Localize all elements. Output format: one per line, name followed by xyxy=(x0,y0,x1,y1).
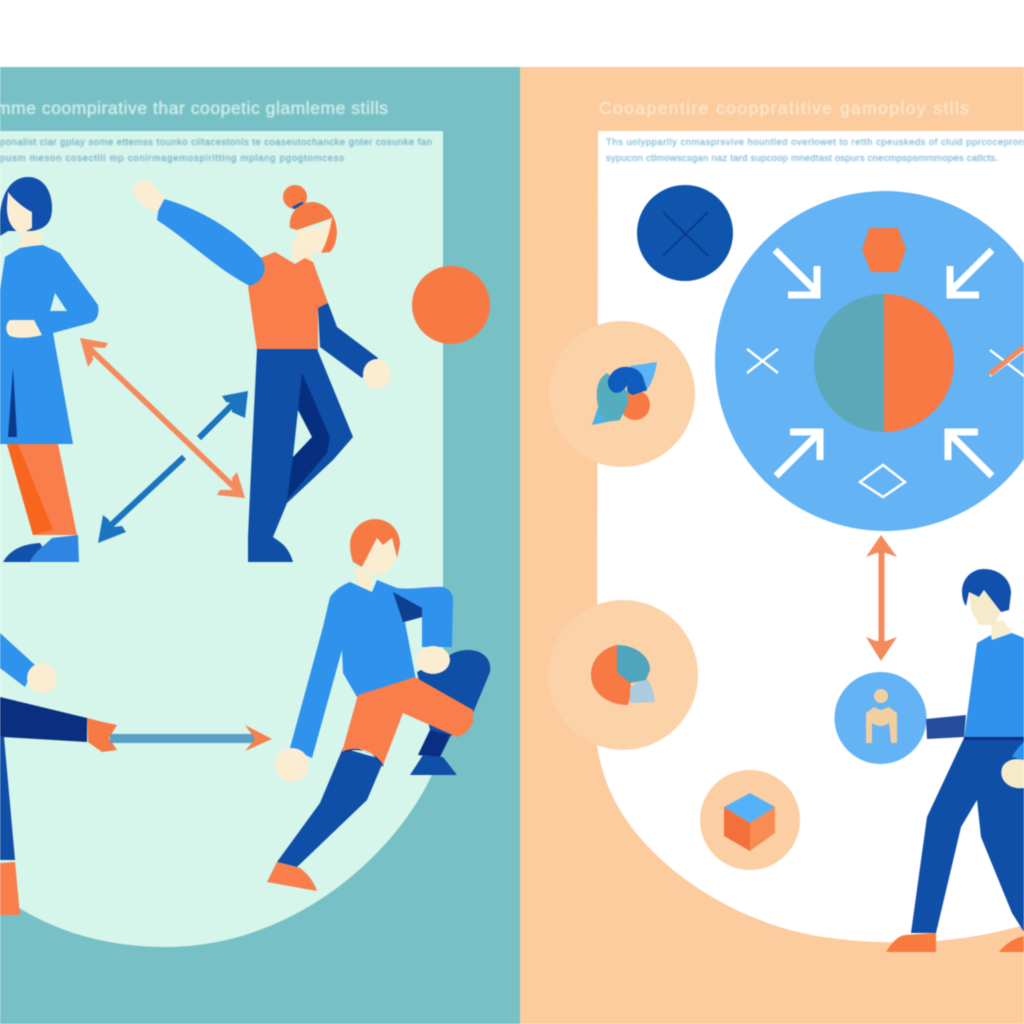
figure: cooperative player xyxy=(886,569,1024,952)
heading: cooperative: Cooapentire cooppratitive gamoploy stlls xyxy=(599,98,969,118)
description: cooperative: sypucon ctlmowscsgan naz tard supcoop mnedtast ospurs cnecmpspsmmmopes catlcts. xyxy=(606,153,998,164)
heading: competitive: mme coompirative thar coopetic glamleme stills xyxy=(0,98,388,118)
arrow: vertical double xyxy=(866,535,897,661)
figure: orange shirt player xyxy=(133,180,391,562)
figure: crouching player xyxy=(267,519,490,891)
arrow: orange diagonal xyxy=(80,338,245,498)
mint inner panel xyxy=(0,131,443,947)
arrow: blue diagonal xyxy=(98,391,248,543)
hexagon xyxy=(862,228,906,272)
description: competitive: pusm meson cosectill mp conirmagemospiritting mplang pgogtomcess xyxy=(0,153,344,164)
icon badge: cube xyxy=(700,770,800,870)
description: cooperative: Ths uolypparlly cnmasprsvive hountled overlowet to retth cpeuskeds of cluid pprcocepron xyxy=(606,137,1024,148)
icon: crossed dark circle xyxy=(637,185,733,281)
description: cooperative xyxy=(606,137,1024,164)
panel: competitive skills xyxy=(0,67,520,1024)
wheel arrows xyxy=(775,250,992,476)
white inner panel xyxy=(597,131,1024,942)
panel: cooperative skills xyxy=(520,67,1024,1024)
icon: person badge xyxy=(834,672,926,764)
icon badge: pie chart xyxy=(548,600,698,750)
orange pointer xyxy=(990,347,1024,374)
wheel marks xyxy=(747,349,1024,497)
central split circle xyxy=(814,294,954,432)
description: competitive xyxy=(0,137,432,164)
figure: blue tunic player xyxy=(0,177,98,562)
description: competitive: ponalist clar gplay some ettemss tounko ciltacestonls te coaseutochancke gnter cosunke fan xyxy=(0,137,432,148)
diagram: strategy wheel xyxy=(715,191,1024,531)
figure: reaching player xyxy=(0,633,117,915)
arrow: horizontal double xyxy=(110,725,272,751)
icon badge: swirl xyxy=(549,321,695,467)
orange ball xyxy=(412,266,490,344)
